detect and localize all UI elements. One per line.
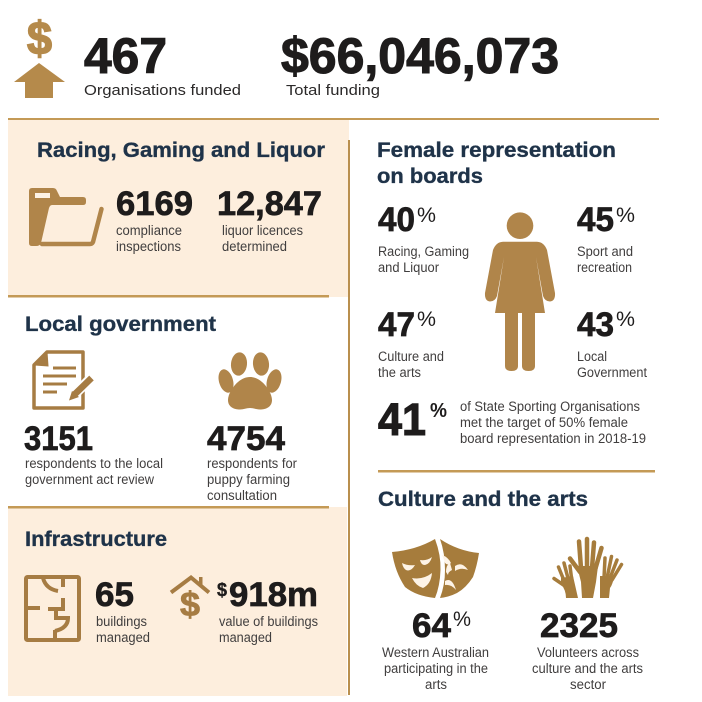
- stat: 64% western australian participation: arts: [425, 677, 447, 692]
- panel: female representation on boards: [377, 139, 647, 446]
- stat: 2325 volunteers: culture and the arts: [532, 661, 643, 676]
- stat: buildings managed: buildings: [96, 614, 147, 629]
- stat: 47% culture and the arts: 47: [378, 306, 415, 344]
- stat: buildings managed: [95, 576, 150, 645]
- stat: 47% culture and the arts: [378, 306, 444, 380]
- stat: puppy farming respondents: 4754: [207, 420, 285, 458]
- stat: 45% sport and recreation: [577, 201, 635, 275]
- stat: 43% local government: [577, 306, 647, 380]
- header: funding totals: [14, 12, 559, 99]
- stat: compliance inspections: [116, 185, 193, 254]
- stat: local government act review respondents: [24, 420, 163, 487]
- stat: value of buildings managed: 918m: [229, 576, 318, 614]
- stat: puppy farming respondents: [207, 420, 297, 503]
- stat: 64% western australian participation: 64: [412, 607, 451, 645]
- stat: value of buildings managed: value of buildings: [219, 614, 318, 629]
- panel: racing, gaming and liquor: [8, 120, 349, 297]
- stat: puppy farming respondents: puppy farming: [207, 472, 290, 487]
- stat: 2325 volunteers: Volunteers across: [537, 645, 639, 660]
- stat: 45% sport and recreation: 45: [577, 201, 614, 239]
- stat: 45% sport and recreation: %: [616, 204, 635, 227]
- stat: 41% of state sporting organisations: met the target of 50% female: [460, 415, 628, 430]
- stat: value of buildings managed: [217, 576, 318, 645]
- icon: theatre masks: [392, 539, 479, 598]
- stat: 43% local government: Local: [577, 349, 607, 364]
- stat: buildings managed: managed: [96, 630, 150, 645]
- heading: female representation on boards: Female representation: [377, 139, 616, 162]
- panel: infrastructure: [8, 507, 347, 696]
- stat: 2325 volunteers: 2325: [540, 607, 618, 645]
- stat: organisations funded: 467: [84, 28, 167, 84]
- stat: liquor licences determined: determined: [222, 239, 287, 254]
- stat: 40% racing, gaming and liquor: [378, 201, 469, 275]
- heading: female representation on boards: [377, 139, 616, 188]
- stat: value of buildings managed: $: [217, 580, 227, 600]
- stat: 47% culture and the arts: the arts: [378, 365, 421, 380]
- icon: raised hands: [554, 539, 622, 598]
- icon: house with dollar: $: [180, 586, 200, 624]
- stat: liquor licences determined: 12,847: [217, 185, 322, 223]
- panel: local government: [24, 313, 297, 503]
- stat: 45% sport and recreation: Sport and: [577, 244, 633, 259]
- stat: 64% western australian participation: Western Australian: [382, 645, 489, 660]
- stat: liquor licences determined: [217, 185, 322, 254]
- icon: female figure: [485, 212, 555, 371]
- stat: 41% of state sporting organisations: 41: [378, 394, 426, 445]
- stat: 40% racing, gaming and liquor: 40: [378, 201, 415, 239]
- stat: 47% culture and the arts: Culture and: [378, 349, 444, 364]
- icon: floor plan: [26, 577, 79, 640]
- stat: 40% racing, gaming and liquor: %: [417, 204, 436, 227]
- stat: 2325 volunteers: sector: [570, 677, 606, 692]
- stat: compliance inspections: inspections: [116, 239, 181, 254]
- stat: 41% of state sporting organisations: %: [430, 400, 447, 422]
- stat: puppy farming respondents: consultation: [207, 488, 277, 503]
- stat: liquor licences determined: liquor licences: [222, 223, 303, 238]
- icon: dollar over up arrow: [14, 12, 65, 98]
- stat: 47% culture and the arts: %: [417, 308, 436, 331]
- stat: buildings managed: 65: [95, 576, 134, 614]
- icon: house with dollar: [171, 577, 209, 624]
- stat: 2325 volunteers: [532, 607, 643, 692]
- stat: local government act review respondents: 3151: [24, 420, 93, 458]
- stat: 40% racing, gaming and liquor: and Liquor: [378, 260, 439, 275]
- stat: 41% of state sporting organisations: of State Sporting Organisations: [460, 399, 640, 414]
- stat: puppy farming respondents: respondents for: [207, 456, 297, 471]
- panel: culture and the arts: [378, 488, 643, 692]
- stat: compliance inspections: compliance: [116, 223, 182, 238]
- stat: 41% of state sporting organisations: [378, 394, 646, 446]
- stat: local government act review respondents: government act review: [25, 472, 154, 487]
- stat: 43% local government: 43: [577, 306, 614, 344]
- stat: 64% western australian participation: participating in the: [384, 661, 488, 676]
- stat: local government act review respondents: respondents to the local: [25, 456, 163, 471]
- stat: value of buildings managed: managed: [219, 630, 272, 645]
- stat: 64% western australian participation: %: [453, 608, 471, 631]
- icon: document and pencil: [34, 352, 93, 408]
- stat: 41% of state sporting organisations: board representation in 2018-19: [460, 431, 646, 446]
- icon: dollar over up arrow: $: [27, 12, 52, 64]
- stat: 40% racing, gaming and liquor: Racing, Gaming: [378, 244, 469, 259]
- heading: racing, gaming and liquor: Racing, Gaming and Liquor: [37, 139, 325, 162]
- heading: culture and the arts: Culture and the arts: [378, 488, 588, 511]
- heading: infrastructure: Infrastructure: [25, 528, 167, 551]
- stat: 43% local government: %: [616, 308, 635, 331]
- icon: folder: [29, 188, 102, 246]
- stat: compliance inspections: 6169: [116, 185, 193, 223]
- heading: female representation on boards: on boards: [377, 165, 483, 188]
- stat: 64% western australian participation: [382, 607, 489, 692]
- stat: organisations funded: [84, 28, 241, 99]
- stat: 43% local government: Government: [577, 365, 647, 380]
- stat: 45% sport and recreation: recreation: [577, 260, 632, 275]
- stat: total funding: $66,046,073: [281, 28, 559, 84]
- stat: organisations funded: Organisations funded: [84, 82, 241, 99]
- icon: paw print: [216, 352, 284, 410]
- heading: local government: Local government: [25, 313, 216, 336]
- stat: total funding: Total funding: [286, 82, 380, 99]
